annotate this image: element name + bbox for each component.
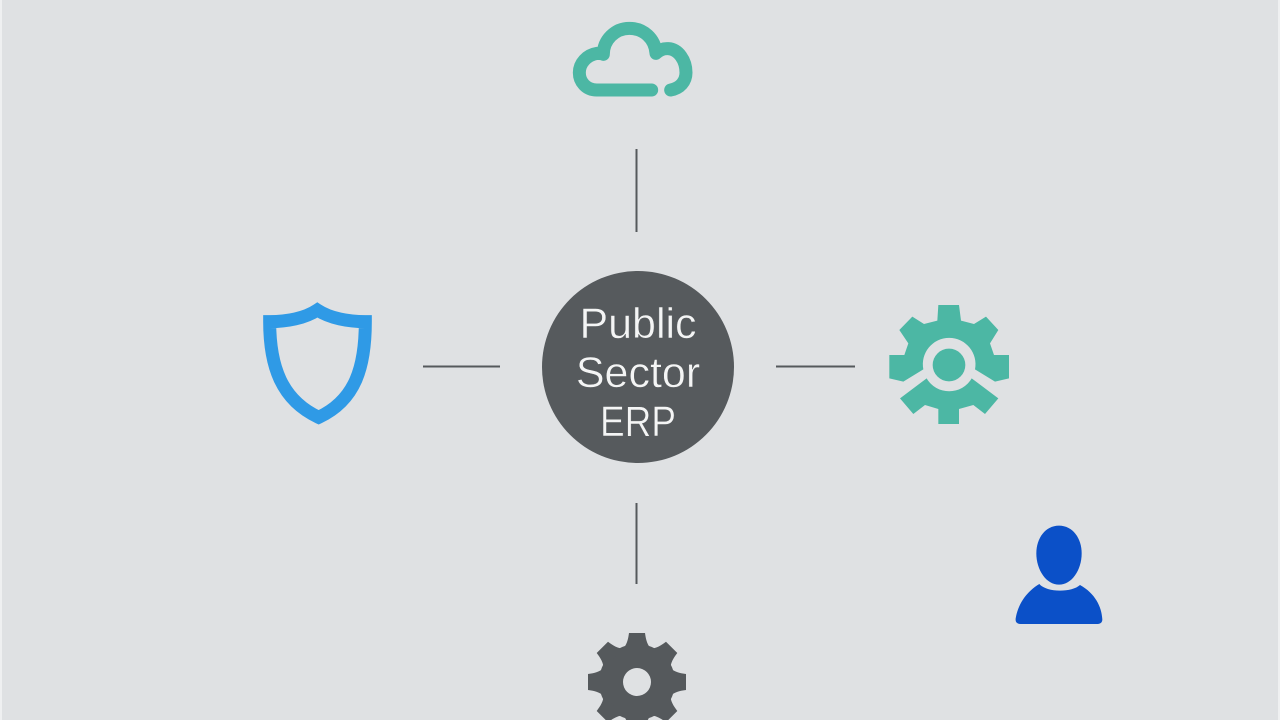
hub label: Sector [576,349,700,397]
connector: left [423,366,500,368]
icon: shield [270,310,365,417]
connector: top [636,149,638,232]
icon: user [1016,526,1102,624]
icon: teal split gear [889,305,1009,424]
connector: bottom [636,503,638,584]
hub label [576,300,700,446]
icon: dark gear [588,633,686,720]
hub label: Public [579,300,697,348]
connector: right [776,366,855,368]
central hub: Public Sector ERP [542,271,734,463]
hub label: ERP [600,398,676,446]
icon: cloud [579,28,686,90]
